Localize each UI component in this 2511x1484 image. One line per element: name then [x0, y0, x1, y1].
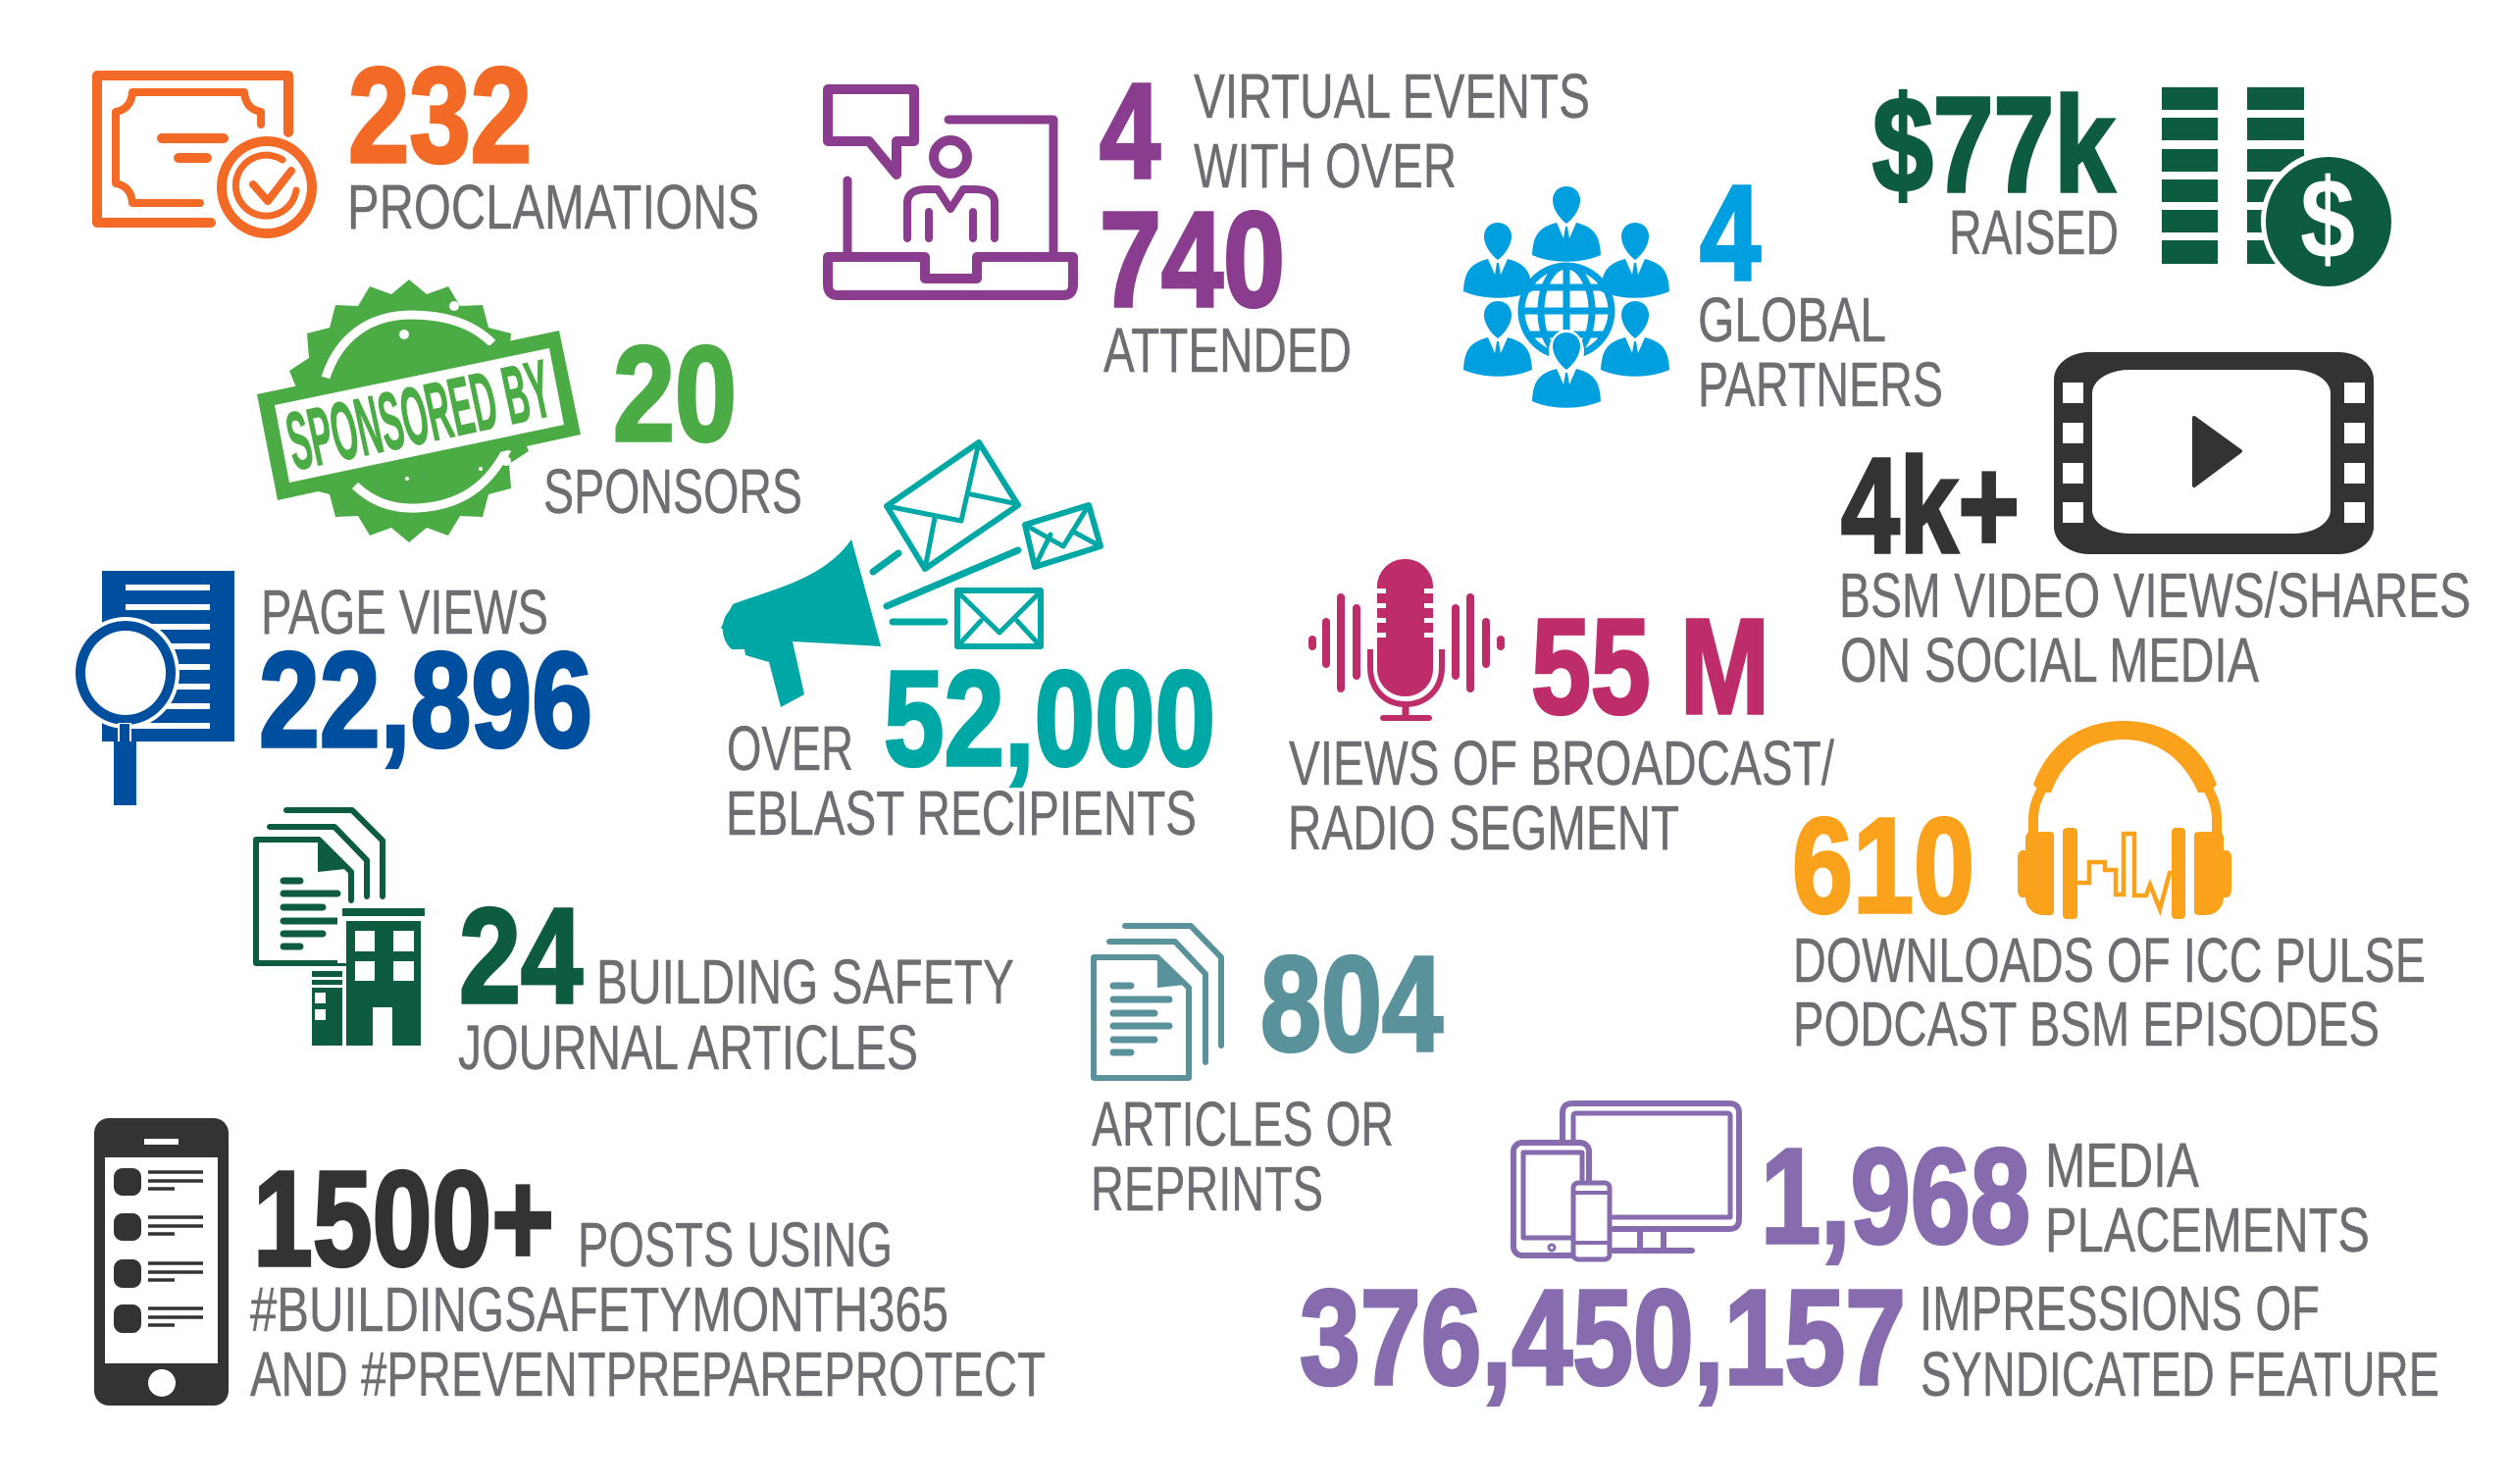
text: building safety journal articles: BUILDING SAFETY: [596, 947, 1014, 1017]
icon: megaphone with envelopes: [721, 442, 1101, 707]
number: 1,968: 1,968: [1761, 1121, 2030, 1272]
number: 55 M: 55 M: [1531, 591, 1769, 742]
number: 740: 740: [1100, 184, 1285, 335]
icon: monitor, tablet and phone: [1513, 1103, 1739, 1259]
icon: stacked documents: [1094, 926, 1221, 1078]
text: media placements: PLACEMENTS: [2045, 1195, 2370, 1265]
number: 4k+: 4k+: [1841, 431, 2020, 582]
panel: sponsors: [257, 280, 802, 542]
icon: microphone with sound bars: [1312, 559, 1501, 721]
number: 1500+: 1500+: [253, 1144, 554, 1295]
label: over: OVER: [727, 713, 853, 784]
icon: laptop with speech bubble and presenter: [828, 89, 1073, 295]
icon: headphones with sound wave: [2018, 721, 2231, 919]
text: articles or reprints: [1091, 1089, 1394, 1224]
panel: media placements: [1513, 1103, 2370, 1272]
text: bsm video views: ON SOCIAL MEDIA: [1840, 625, 2259, 695]
number: 24: 24: [459, 881, 583, 1032]
number: 4 events: 4: [1100, 56, 1160, 207]
icon: film strip with play button: [2054, 352, 2374, 554]
panel: eblast: [721, 442, 1215, 848]
number: 22,896: 22,896: [259, 625, 592, 776]
label: raised: RAISED: [1949, 197, 2119, 268]
number: 52,000: 52,000: [884, 643, 1215, 794]
text: building safety journal articles: [458, 947, 1014, 1083]
text: views of broadcast radio segment: [1288, 728, 1834, 863]
panel: podcast downloads: [1792, 721, 2426, 1059]
label: proclamations: PROCLAMATIONS: [347, 172, 759, 242]
panel: articles or reprints: [1091, 926, 1443, 1224]
number: 804: 804: [1260, 929, 1443, 1080]
text: articles or reprints: REPRINTS: [1091, 1153, 1323, 1224]
icon: coin stacks with dollar coin: [2162, 87, 2396, 290]
text: posts using hashtags: POSTS USING: [578, 1209, 893, 1280]
text: bsm video views: [1839, 560, 2471, 695]
text: views of broadcast radio segment: RADIO SEGMENT: [1288, 793, 1679, 863]
text: media placements: MEDIA: [2045, 1130, 2199, 1201]
panel: raised: [1872, 70, 2396, 290]
icon: certificate with check seal: [97, 76, 312, 233]
text: global partners: [1698, 284, 1943, 420]
icon: people around a globe: [1463, 186, 1669, 408]
number: 610: 610: [1792, 791, 1974, 942]
icon: smartphone with feed: [94, 1118, 229, 1406]
text: media placements: [2045, 1130, 2370, 1265]
panel: global partners: [1463, 158, 1943, 420]
text: virtual events with over: WITH OVER: [1194, 130, 1457, 201]
text: posts using hashtags: [250, 1209, 1046, 1409]
text: impressions of syndicated feature: [1920, 1273, 2439, 1409]
text: posts using hashtags: #BUILDINGSAFETYMONTH365: [250, 1274, 948, 1345]
panel: syndicated feature impressions: [1300, 1262, 2439, 1413]
panel: video views: [1839, 352, 2471, 695]
number: 232: 232: [348, 40, 532, 191]
text: virtual events with over: VIRTUAL EVENTS: [1194, 61, 1590, 131]
icon: sponsored by stamp: [257, 280, 581, 542]
text: building safety journal articles: JOURNAL ARTICLES: [458, 1012, 918, 1083]
label: eblast recipients: EBLAST RECIPIENTS: [726, 778, 1197, 848]
icon: document with magnifier: [72, 571, 234, 805]
icon: documents and buildings: [256, 810, 430, 1046]
number: 20: 20: [613, 319, 737, 470]
text: global partners: GLOBAL: [1698, 284, 1886, 355]
text: downloads of icc pulse podcast: [1793, 925, 2426, 1059]
label: sponsors: SPONSORS: [543, 456, 802, 527]
panel: social posts: [94, 1118, 1046, 1409]
number: 376,450,157: 376,450,157: [1300, 1262, 1906, 1413]
label: attended: ATTENDED: [1103, 315, 1352, 385]
text: views of broadcast radio segment: VIEWS OF BROADCAST/: [1289, 728, 1834, 798]
text: global partners: PARTNERS: [1698, 349, 1943, 420]
panel: journal articles: [256, 810, 1014, 1083]
text: impressions of syndicated feature: IMPRESSIONS OF: [1920, 1273, 2320, 1344]
number: 4 partners: 4: [1700, 158, 1761, 309]
panel: page views: [72, 571, 592, 805]
text: articles or reprints: ARTICLES OR: [1092, 1089, 1394, 1159]
icon: coin stacks with dollar coin: $: [2300, 155, 2355, 282]
number: $77k: $77k: [1872, 70, 2115, 221]
panel: proclamations: [97, 40, 759, 242]
text: virtual events with over: [1194, 61, 1590, 201]
panel: sponsors: SPONSORED BY: [279, 342, 559, 487]
text: posts using hashtags: AND #PREVENTPREPAREPROTECT: [250, 1339, 1046, 1409]
label: page views: PAGE VIEWS: [261, 577, 548, 647]
panel: broadcast views: [1288, 559, 1834, 863]
panel: virtual events: [828, 56, 1590, 385]
